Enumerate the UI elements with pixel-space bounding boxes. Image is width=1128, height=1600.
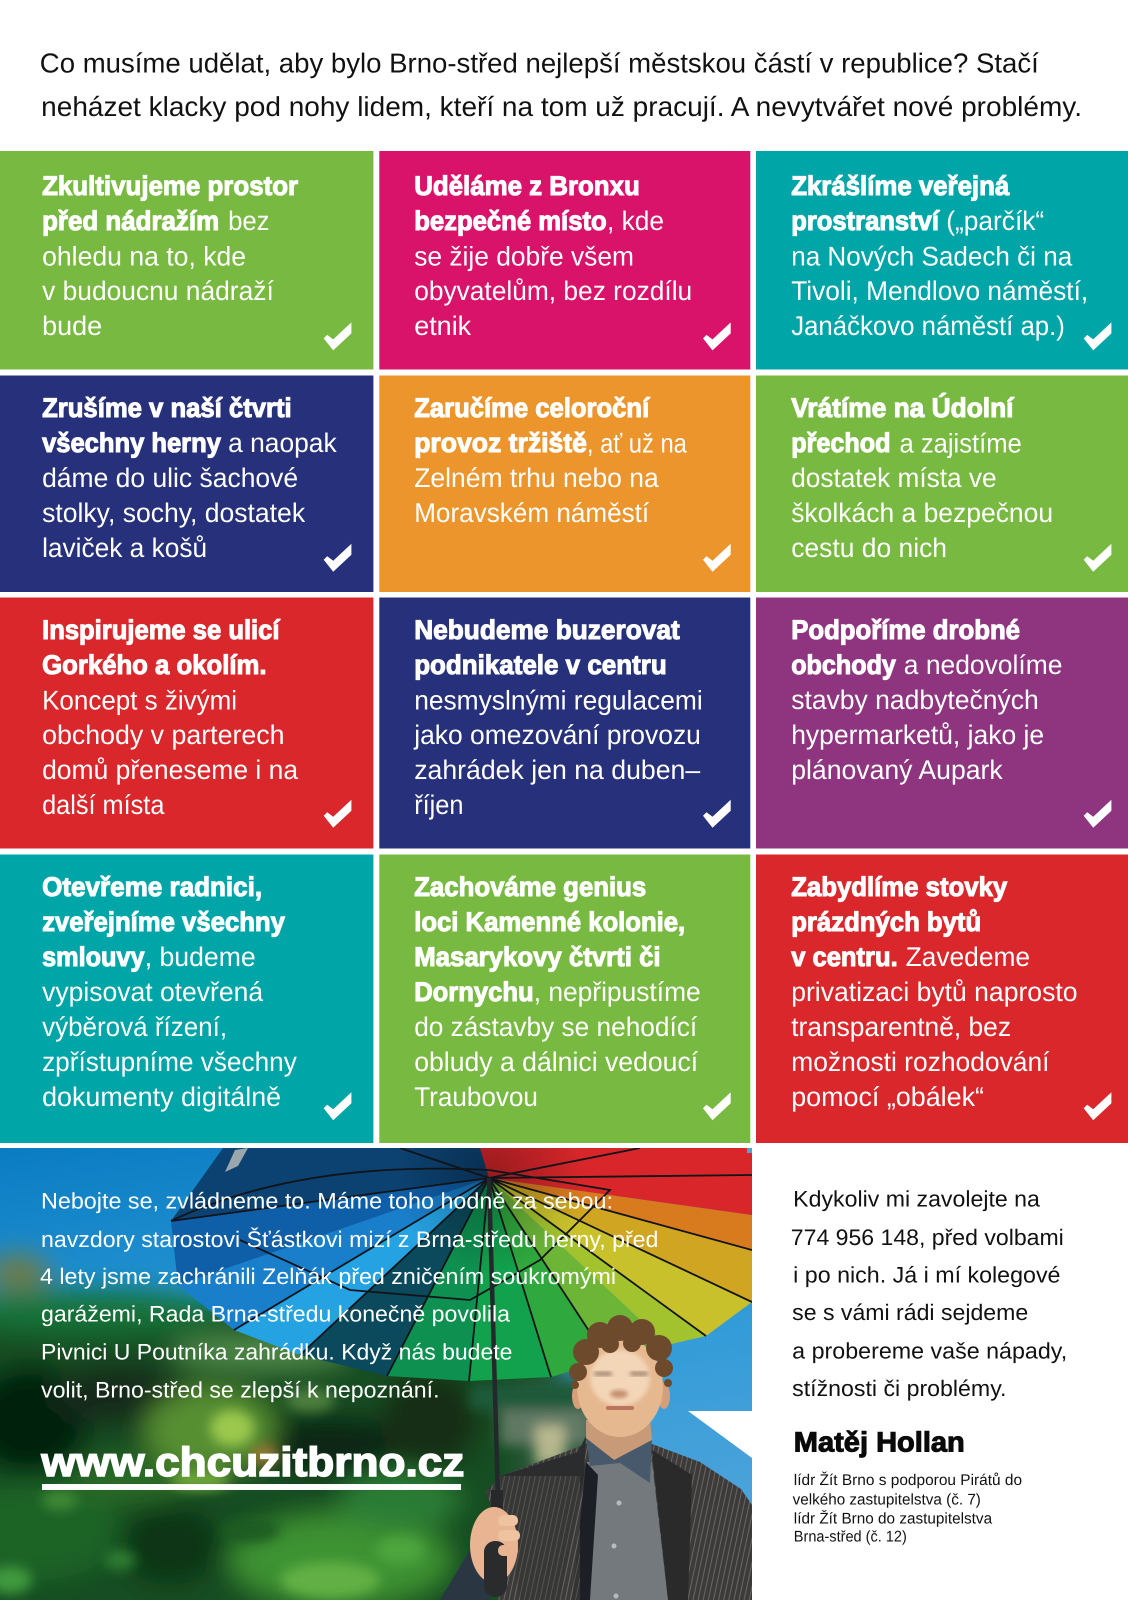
panel text: se žije dobře všem [414, 241, 634, 271]
panel text: obchody [791, 650, 896, 680]
panel text: domů přeneseme i na [42, 755, 299, 785]
rainbow umbrella canopy [170, 1148, 752, 1382]
panel text: Dornychu [414, 977, 534, 1007]
panel text: Masarykovy čtvrti či [414, 942, 661, 972]
icon: check mark [324, 800, 351, 828]
photo text [40, 1189, 658, 1402]
panel text [42, 171, 299, 341]
panel text: ohledu na to, kde [42, 241, 246, 271]
panel text: a zajistíme [899, 428, 1022, 458]
icon: check mark [1084, 322, 1111, 350]
panel text: Traubovou [414, 1082, 538, 1112]
icon: check mark [324, 544, 351, 572]
panel text: další místa [42, 790, 165, 820]
panel text: etnik [414, 311, 472, 341]
panel text: plánovaný Aupark [791, 755, 1003, 785]
photo text: Pivnici U Poutníka zahrádku. Když nás budete [41, 1340, 512, 1365]
panel text: Janáčkovo náměstí ap.) [791, 311, 1065, 341]
panel text: stavby nadbytečných [791, 685, 1039, 715]
panel text: Zavedeme [906, 942, 1030, 972]
panel text: , ať už na [587, 428, 688, 458]
panel text [42, 615, 299, 820]
panel text: možnosti rozhodování [791, 1047, 1050, 1077]
panel text: obludy a dálnici vedoucí [414, 1047, 699, 1077]
panel text: v centru. [791, 942, 898, 972]
panel text: dostatek místa ve [791, 463, 997, 493]
panel text: loci Kamenné kolonie, [414, 907, 685, 937]
panel text: na Nových Sadech či na [791, 241, 1073, 271]
panel text: Zrušíme v naší čtvrti [42, 393, 292, 423]
panel text: smlouvy [42, 942, 145, 972]
panel text: zveřejníme všechny [42, 907, 285, 937]
panel text: Zaručíme celoroční [414, 393, 651, 423]
panel text: hypermarketů, jako je [791, 720, 1044, 750]
panel text: transparentně, bez [791, 1012, 1011, 1042]
man: jacket and shirt [440, 1436, 752, 1600]
hand and umbrella handle [470, 1490, 520, 1597]
panel text: („parčík“ [946, 206, 1044, 236]
panel text: Gorkého a okolím. [42, 650, 267, 680]
panel text: obyvatelům, bez rozdílu [414, 276, 692, 306]
panel text [414, 872, 701, 1112]
panel text: říjen [414, 790, 464, 820]
panel text: prázdných bytů [791, 907, 981, 937]
icon: check mark [1084, 544, 1111, 572]
panel: Zkrášlíme veřejná prostranství [756, 151, 1128, 370]
panel text: Zkultivujeme prostor [42, 171, 299, 201]
panel text: Zabydlíme stovky [791, 872, 1007, 902]
panel text [42, 872, 297, 1112]
panel text: Inspirujeme se ulicí [42, 615, 281, 645]
contact text: a probereme vaše nápady, [792, 1338, 1067, 1363]
panel text: bude [42, 311, 102, 341]
panel: Zabydlíme stovky bytů [756, 854, 1128, 1143]
panel text: do zástavby se nehodící [414, 1012, 698, 1042]
panel text: prostranství [791, 206, 940, 236]
panel text: , kde [607, 206, 664, 236]
panel text [791, 615, 1062, 785]
contact text: se s vámi rádi sejdeme [792, 1300, 1028, 1325]
panel text: stolky, sochy, dostatek [42, 498, 306, 528]
panel: Podpoříme drobné obchody [756, 598, 1128, 848]
candidate description: velkého zastupitelstva (č. 7) [793, 1491, 981, 1508]
panel text: Uděláme z Bronxu [414, 171, 640, 201]
panel: Inspirujeme se ulicí Gorkého [0, 598, 373, 848]
man: head and hair [569, 1315, 673, 1460]
panel text: laviček a košů [42, 533, 207, 563]
umbrella tip [225, 1148, 248, 1172]
blurred foliage background [0, 1254, 620, 1600]
icon: check mark [703, 800, 731, 828]
panel text [791, 171, 1088, 341]
panel text [791, 393, 1053, 563]
panel: Zkultivujeme prostor [0, 151, 373, 370]
panel text: Moravském náměstí [414, 498, 650, 528]
panel text: provoz tržiště [414, 428, 587, 458]
candidate name: Matěj Hollan [794, 1427, 965, 1458]
intro heading text: neházet klacky pod nohy lidem, kteří na tom už pracují. A nevytvářet nové problémy. [41, 91, 1082, 122]
panel text: bezpečné místo [414, 206, 607, 236]
panel text [791, 872, 1078, 1112]
contact text: Kdykoliv mi zavolejte na [793, 1187, 1040, 1212]
umbrella ribs [171, 1148, 752, 1381]
icon: check mark [1084, 1092, 1111, 1120]
panel text: zpřístupníme všechny [42, 1047, 297, 1077]
contact text [791, 1187, 1067, 1401]
panel text: všechny herny [42, 428, 221, 458]
panel text [414, 171, 692, 341]
panel text: před nádražím [42, 206, 219, 236]
photo text: 4 lety jsme zachránili Zelňák před zničením soukromými [40, 1264, 616, 1289]
panel text: výběrová řízení, [42, 1012, 227, 1042]
panel: Zachováme genius loci [379, 854, 750, 1143]
panel text [42, 393, 337, 563]
panel text: Koncept s živými [42, 685, 237, 715]
contact text: stížnosti či problémy. [792, 1376, 1006, 1401]
panel text: a nedovolíme [904, 650, 1062, 680]
candidate description: Brna-střed (č. 12) [794, 1529, 907, 1546]
photo text: Nebojte se, zvládneme to. Máme toho hodně za sebou: [41, 1189, 613, 1214]
candidate description: lídr Žít Brno do zastupitelstva [794, 1509, 992, 1527]
icon: check mark [703, 322, 731, 350]
umbrella shaft [489, 1178, 498, 1500]
photo text: navzdory starostovi Šťástkovi mizí z Brna-středu herny, před [41, 1227, 658, 1252]
panel text: Zelném trhu nebo na [414, 463, 660, 493]
panel text: obchody v parterech [42, 720, 284, 750]
panel text: jako omezování provozu [413, 720, 701, 750]
panel text [414, 393, 688, 528]
panel text: privatizaci bytů naprosto [791, 977, 1078, 1007]
panel text: cestu do nich [791, 533, 947, 563]
panel: Vrátíme Údolní přechod [756, 376, 1128, 592]
panel text: dokumenty digitálně [42, 1082, 281, 1112]
intro heading text [40, 48, 1082, 122]
panel text: školkách a bezpečnou [791, 498, 1053, 528]
panel text: bez [228, 206, 269, 236]
photo text: garážemi, Rada Brna-středu konečně povolila [41, 1301, 510, 1326]
panel text [413, 615, 703, 820]
photo text: volit, Brno-střed se zlepší k nepoznání. [41, 1377, 440, 1402]
panel text: zahrádek jen na duben– [414, 755, 700, 785]
panel: Otevřeme radnici [0, 854, 373, 1143]
panel text: Podpoříme drobné [791, 615, 1020, 645]
panel text: Tivoli, Mendlovo náměstí, [791, 276, 1088, 306]
candidate description [793, 1471, 1022, 1546]
panel text: a naopak [228, 428, 337, 458]
panel text: pomocí „obálek“ [791, 1082, 984, 1112]
icon: check mark [324, 322, 351, 350]
panel text: v budoucnu nádraží [42, 276, 274, 306]
panel text: Otevřeme radnici, [42, 872, 262, 902]
icon: check mark [324, 1092, 351, 1120]
white corner notch [688, 1411, 752, 1458]
panel text: dáme do ulic šachové [42, 463, 298, 493]
panel text: Nebudeme buzerovat [414, 615, 680, 645]
intro heading text: Co musíme udělat, aby bylo Brno-střed nejlepší městskou částí v republice? Stačí [40, 48, 1039, 79]
website link: www.chcuzitbrno.cz [40, 1439, 464, 1485]
icon: check mark [1084, 800, 1111, 828]
photo: man with rainbow umbrella [0, 1148, 752, 1600]
panel: Uděláme z Bronxu [379, 151, 750, 370]
panel text: , budeme [145, 942, 256, 972]
panel text: Vrátíme na Údolní [791, 393, 1015, 423]
icon: check mark [703, 544, 731, 572]
panel: Zaručíme provoz tržiště [379, 376, 750, 592]
panel text: podnikatele v centru [414, 650, 667, 680]
panel: Nebudeme buzerovat podnikatele [379, 598, 750, 848]
candidate description: lídr Žít Brno s podporou Pirátů do [794, 1471, 1022, 1489]
contact text: 774 956 148, před volbami [791, 1225, 1064, 1250]
panel text: Zkrášlíme veřejná [791, 171, 1010, 201]
panel text: Zachováme genius [414, 872, 646, 902]
shirt buttons [612, 1500, 622, 1598]
panel text: nesmyslnými regulacemi [414, 685, 703, 715]
contact text: i po nich. Já i mí kolegové [793, 1263, 1060, 1288]
panel text: přechod [791, 428, 890, 458]
panel text: , nepřipustíme [534, 977, 701, 1007]
panel: Zrušíme herny [0, 376, 373, 592]
icon: check mark [703, 1092, 731, 1120]
panel text: vypisovat otevřená [42, 977, 264, 1007]
